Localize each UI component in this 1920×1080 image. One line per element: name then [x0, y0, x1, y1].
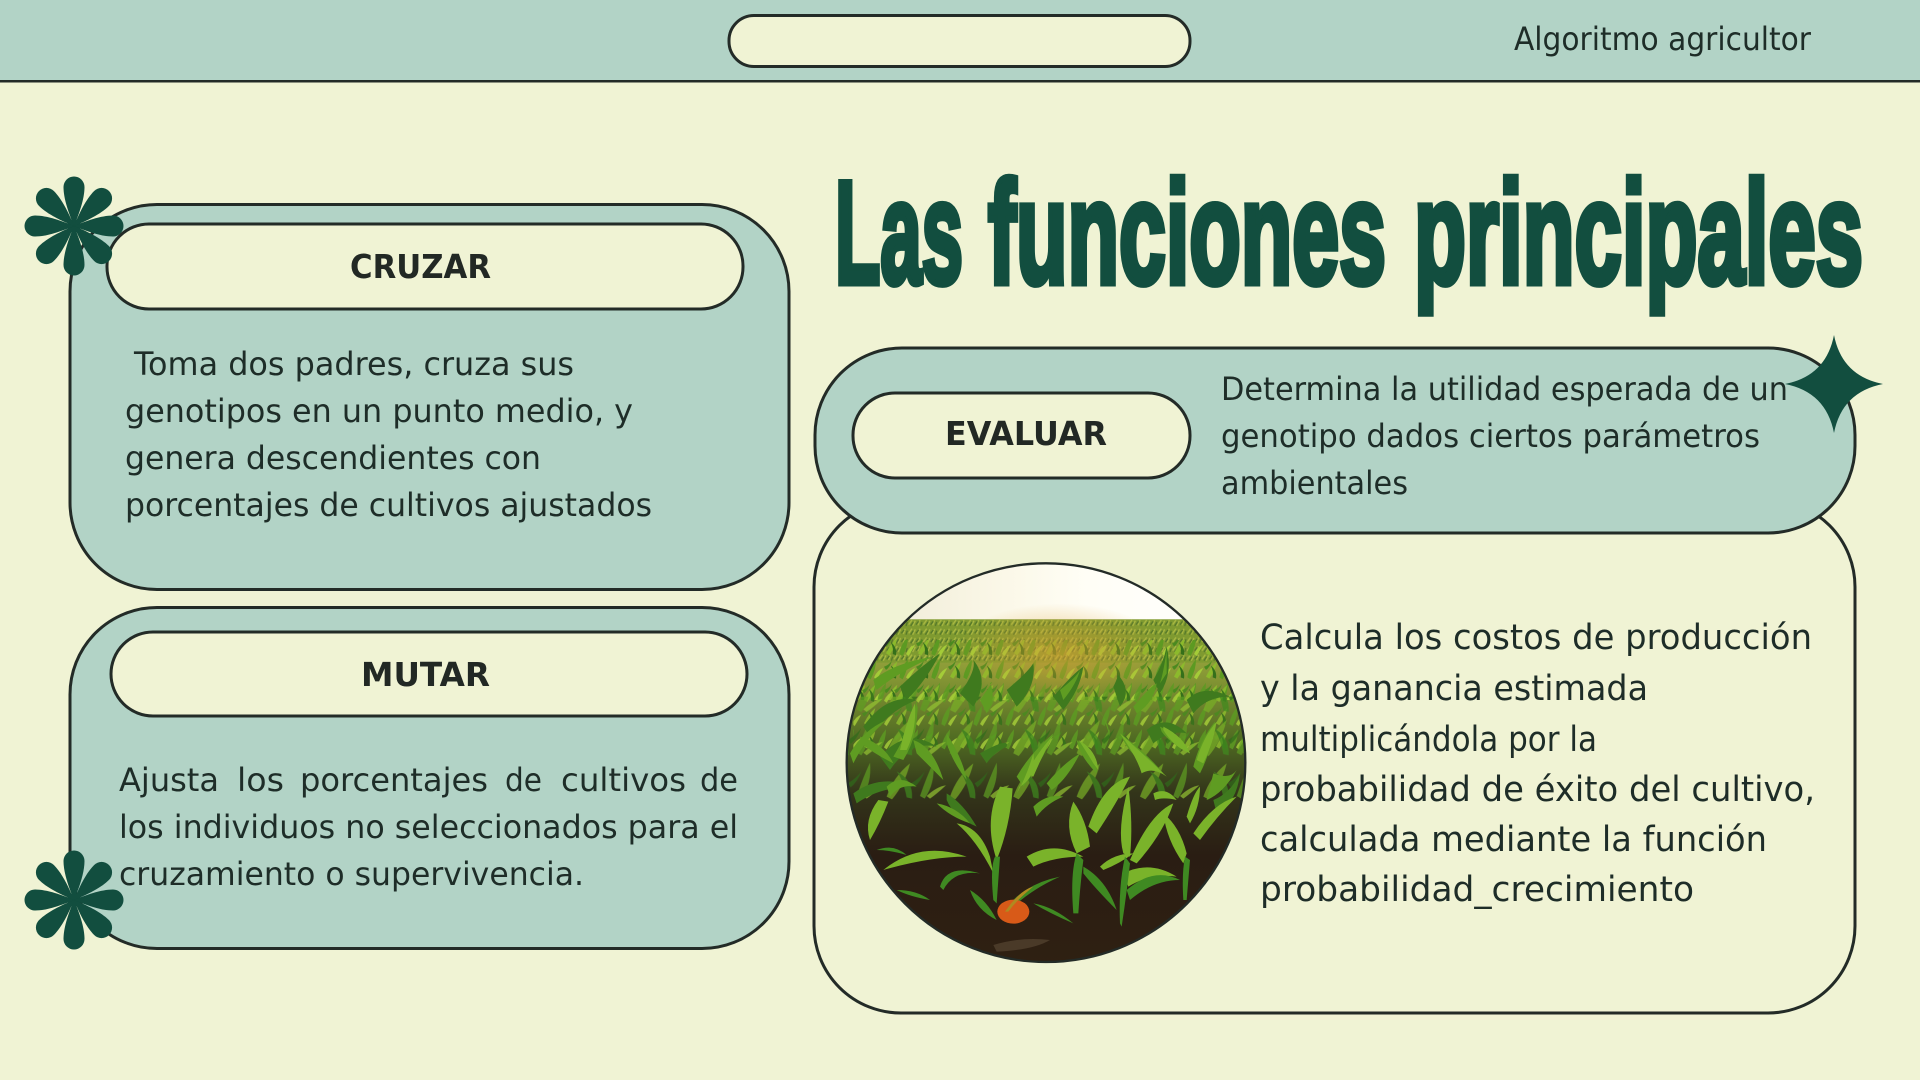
title: Las — [835, 151, 963, 314]
mutar description: Ajusta — [119, 761, 219, 799]
header bar — [0, 0, 1920, 82]
header empty pill — [729, 16, 1190, 66]
evaluar description: genotipo dados ciertos parámetros — [1221, 417, 1760, 455]
calcular description: Calcula los costos de producción — [1260, 618, 1812, 658]
cruzar description: porcentajes de cultivos ajustados — [125, 486, 652, 524]
calcular description: multiplicándola por la — [1260, 720, 1597, 760]
panel: mutar — [70, 608, 789, 948]
panel: calcular costos — [814, 500, 1855, 1013]
cruzar description — [125, 345, 652, 524]
photo: corn field — [843, 560, 1260, 966]
mutar description: cruzamiento o supervivencia. — [119, 855, 584, 893]
cruzar description: genotipos en un punto medio, y — [125, 392, 633, 430]
icon: four-point star — [1785, 335, 1883, 433]
cruzar heading pill: CRUZAR — [350, 247, 491, 286]
calcular description — [1260, 618, 1815, 910]
evaluar heading pill — [853, 393, 1190, 478]
mutar description: porcentajes — [300, 761, 488, 799]
mutar description: cultivos — [561, 761, 686, 799]
cruzar description: genera descendientes con — [125, 439, 541, 477]
evaluar description: Determina la utilidad esperada de un — [1221, 370, 1788, 408]
calcular description: probabilidad de éxito del cultivo, — [1260, 770, 1815, 810]
calcular description: calculada mediante la función — [1260, 820, 1767, 860]
icon: flower top — [24, 176, 124, 276]
calcular description: y la ganancia estimada — [1260, 669, 1648, 709]
evaluar description — [1221, 370, 1788, 502]
mutar description — [119, 761, 738, 893]
mutar description: los — [237, 761, 284, 799]
mutar description: los individuos no seleccionados para el — [119, 808, 738, 846]
title — [835, 151, 1863, 314]
icon: flower bottom — [24, 850, 124, 950]
calcular description: probabilidad_crecimiento — [1260, 870, 1694, 910]
cruzar description: Toma dos padres, cruza sus — [133, 345, 574, 383]
mutar description: de — [505, 761, 542, 799]
cruzar heading pill — [107, 224, 743, 309]
header label: Algoritmo agricultor — [1514, 20, 1812, 58]
evaluar description: ambientales — [1221, 464, 1408, 502]
panel: evaluar — [815, 348, 1855, 533]
mutar description: de — [700, 761, 738, 799]
title: funciones — [988, 151, 1386, 314]
mutar heading pill — [111, 632, 747, 716]
evaluar heading pill: EVALUAR — [945, 414, 1107, 453]
panel: cruzar — [70, 204, 789, 590]
mutar heading pill: MUTAR — [361, 655, 490, 694]
